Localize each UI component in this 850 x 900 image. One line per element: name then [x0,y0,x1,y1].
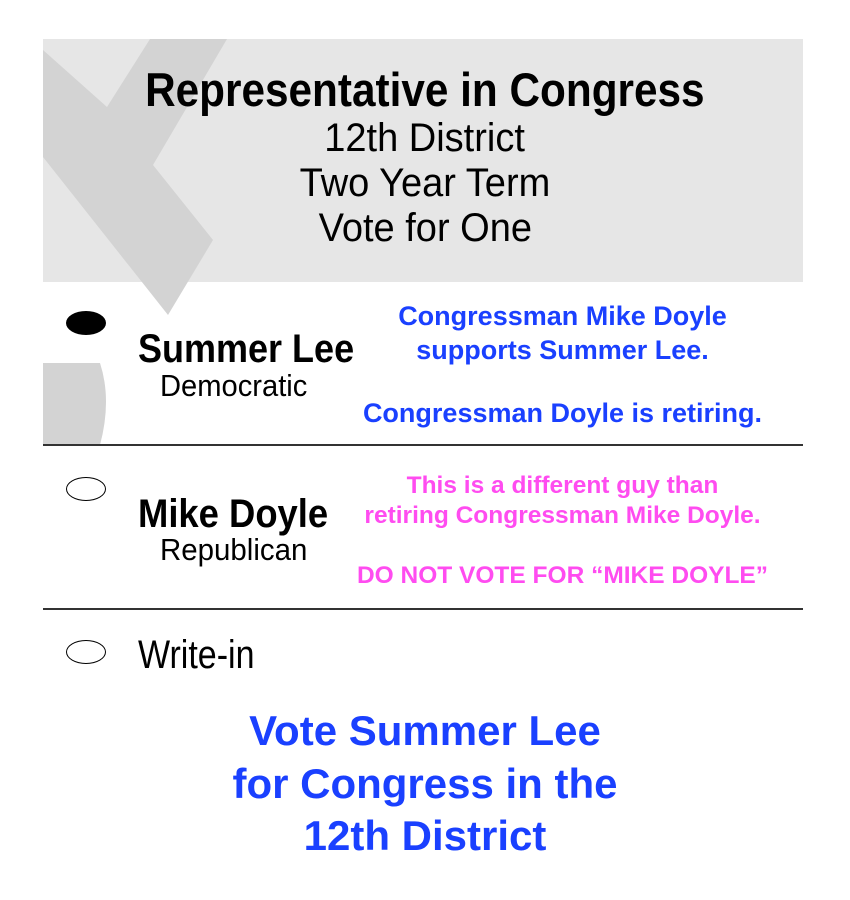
blue note [363,301,762,428]
blue note: Congressman Doyle is retiring. [363,398,762,428]
candidate: Summer Lee [66,301,762,428]
bottom call to action: for Congress in the [232,760,618,806]
name: Mike Doyle [138,492,328,536]
candidate: Mike Doyle [66,472,768,589]
oval empty [66,477,106,501]
write-in row [66,633,255,677]
subtitle lines: 12th District [325,116,525,160]
subtitle lines [300,116,550,250]
pink warning: retiring Congressman Mike Doyle. [364,502,761,529]
blue note: supports Summer Lee. [416,335,709,365]
bottom call to action: 12th District [304,812,546,859]
oval filled [66,311,106,335]
pink warning: DO NOT VOTE FOR “MIKE DOYLE” [357,562,768,589]
oval empty [66,640,106,664]
bottom call to action: Vote Summer Lee [249,707,601,754]
subtitle lines: Vote for One [318,206,532,250]
pink warning [357,472,768,589]
party: Democratic [160,368,307,403]
header panel [43,39,803,282]
label: Write-in [138,633,255,677]
name: Summer Lee [138,327,354,371]
subtitle lines: Two Year Term [300,161,550,205]
bottom call to action [232,707,618,859]
title: Representative in Congress [145,63,705,116]
pink warning: This is a different guy than [407,472,718,499]
blue note: Congressman Mike Doyle [398,301,727,331]
party: Republican [160,532,307,567]
